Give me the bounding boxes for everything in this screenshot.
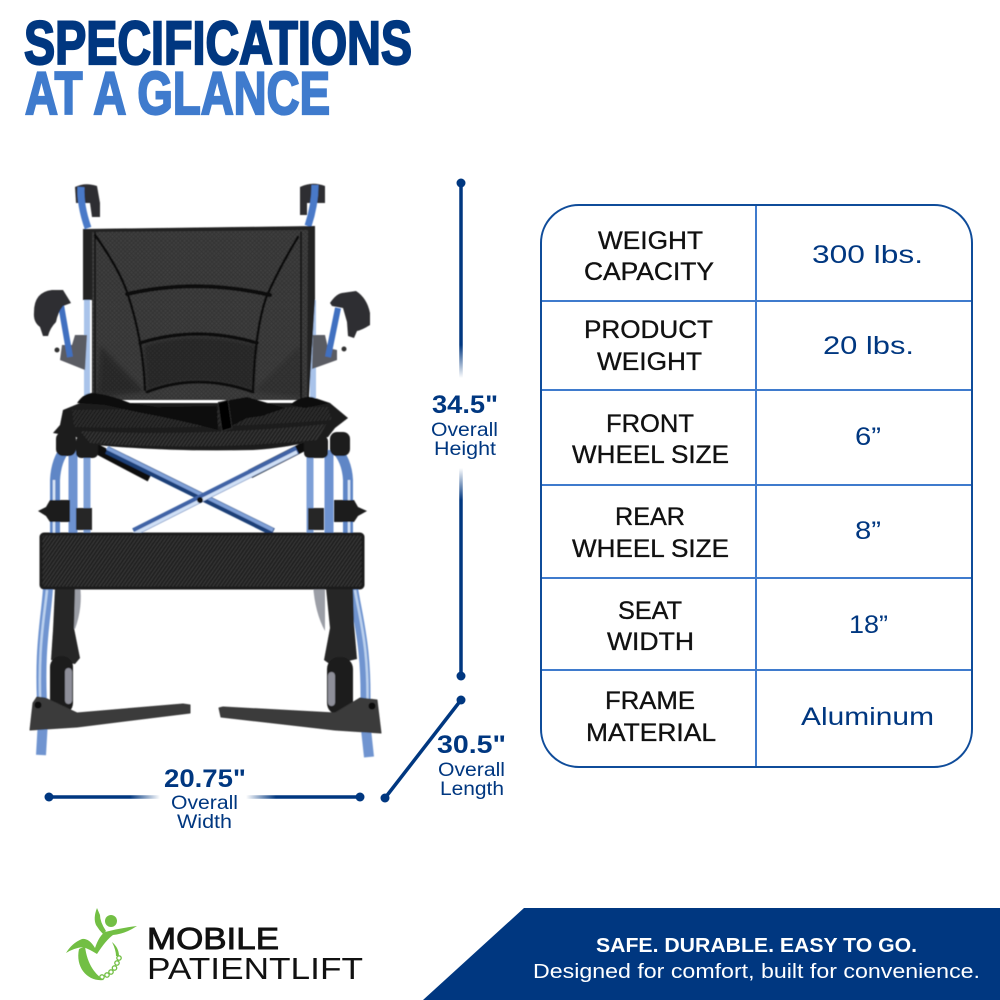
dimension: overall width: 20.75" [164, 765, 246, 793]
row: rear wheel size: 8” [855, 517, 881, 545]
seat belt and buckle [77, 393, 330, 431]
rear wheels [71, 585, 325, 631]
row: product weight: PRODUCT [584, 316, 713, 344]
dimension: overall height: Overall [431, 420, 498, 441]
row: product weight: 20 lbs. [823, 332, 914, 360]
row: frame material: Aluminum [801, 703, 934, 731]
specifications table [541, 205, 972, 767]
footplates [30, 697, 381, 733]
row: front wheel size [572, 410, 881, 469]
row: seat width: 18” [849, 611, 888, 639]
dimension: overall width: Overall [171, 793, 238, 814]
footer banner: Designed for comfort, built for convenience. [533, 960, 980, 983]
title: SPECIFICATIONS [24, 9, 412, 77]
dimension: overall height: Height [434, 439, 497, 460]
arm posts [61, 305, 338, 357]
footer banner: SAFE. DURABLE. EASY TO GO. [596, 935, 917, 957]
logo wordmark: PATIENTLIFT [147, 951, 363, 986]
frame clamps [38, 432, 367, 530]
backrest shading [143, 336, 257, 392]
row: product weight: WEIGHT [597, 348, 702, 376]
table grid [541, 205, 972, 767]
push handles [75, 184, 325, 228]
dimension: overall height [431, 178, 498, 680]
arm brackets [54, 335, 346, 370]
row: frame material [586, 687, 934, 747]
icon: patient lift figure [66, 908, 137, 980]
row: front wheel size: FRONT [606, 410, 694, 438]
row: weight capacity: WEIGHT [598, 227, 703, 255]
backrest seams [95, 232, 301, 398]
logo wordmark [147, 921, 363, 986]
backrest [83, 226, 315, 400]
row: front wheel size: WHEEL SIZE [572, 441, 729, 469]
front wheel forks and casters [50, 588, 357, 715]
seat cushion [53, 403, 348, 450]
row: rear wheel size [572, 503, 881, 563]
mid frame tubes [54, 448, 349, 533]
rear uprights [84, 300, 316, 398]
footer banner [423, 908, 1000, 1000]
row: rear wheel size: WHEEL SIZE [572, 535, 729, 563]
dimension: overall width [44, 765, 364, 833]
logo [66, 908, 363, 986]
dimension: overall width: Width [177, 812, 232, 833]
footrest strap [41, 534, 363, 588]
row: seat width: WIDTH [607, 628, 694, 656]
dimension: overall length: Overall [438, 760, 505, 781]
row: product weight [584, 316, 914, 376]
dimension: overall length: 30.5" [437, 731, 506, 759]
armrests [34, 290, 370, 338]
dimension: overall length [380, 696, 506, 802]
row: weight capacity: CAPACITY [584, 258, 714, 286]
row: front wheel size: 6” [855, 423, 881, 451]
row: rear wheel size: REAR [615, 503, 685, 531]
row: weight capacity: 300 lbs. [812, 241, 923, 269]
row: seat width [607, 597, 888, 656]
row: frame material: FRAME [605, 687, 695, 715]
row: seat width: SEAT [618, 597, 682, 625]
dimension: overall height: 34.5" [432, 391, 498, 419]
wheelchair illustration [30, 184, 381, 757]
logo wordmark: MOBILE [147, 921, 279, 956]
title [24, 9, 412, 127]
lower frame tubes [40, 588, 369, 757]
row: weight capacity [584, 227, 923, 286]
row: frame material: MATERIAL [586, 719, 716, 747]
title: AT A GLANCE [25, 60, 330, 127]
dimension: overall length: Length [440, 779, 504, 800]
cross brace [93, 445, 307, 534]
